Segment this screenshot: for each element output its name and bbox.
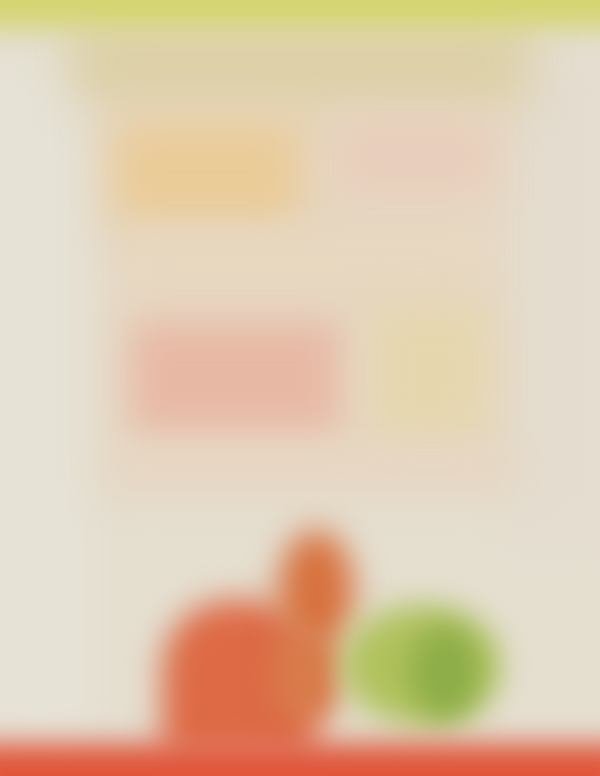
panel: top left orange block	[112, 122, 302, 222]
red base band	[0, 744, 600, 776]
panel: lower pink strip	[110, 455, 510, 490]
panel: middle band	[130, 235, 470, 295]
panel: bottom right yellow block	[372, 305, 488, 435]
illustration: apple centre overlap	[270, 630, 340, 720]
top header band	[0, 0, 600, 27]
panel: central content area	[105, 70, 510, 490]
panel: bottom left salmon block	[130, 322, 340, 432]
header fade	[70, 25, 530, 100]
illustration: green apple dark side	[410, 625, 480, 720]
illustration: green apple	[342, 605, 500, 725]
illustration: red apple body	[162, 600, 317, 755]
panel: right margin light column	[515, 60, 600, 540]
panel: top right pink block	[335, 122, 495, 192]
illustration: apple top	[278, 530, 354, 650]
panel: left margin light column	[0, 60, 90, 740]
